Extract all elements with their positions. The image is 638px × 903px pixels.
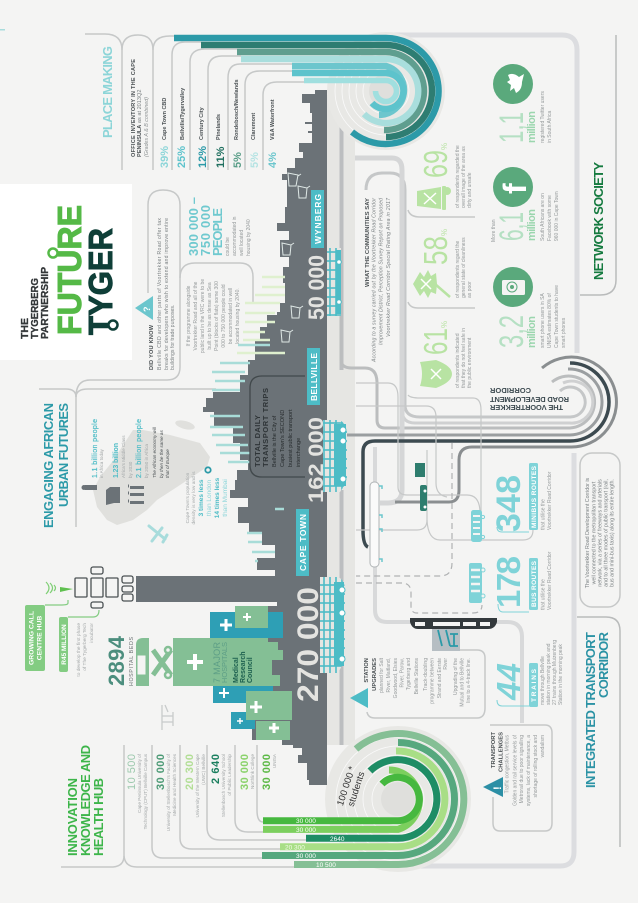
transport challenges: Traffic congestion, Metbus (504, 735, 510, 793)
logo panel: PARTNERSHIP (40, 267, 51, 339)
what the communities say: According to a survey carried out by the Voortrekker Road Corridor (372, 198, 378, 363)
stat: minibus routes (490, 463, 553, 532)
title: innovation knowledge and health hub: KNOWLEDGE AND (78, 745, 93, 856)
station upgrades: Bellville Stations (414, 658, 420, 694)
stat: 61 percent (417, 321, 473, 388)
stat: bus routes (490, 551, 553, 612)
big figures and station labels: 50 000 (304, 255, 329, 320)
station upgrades: Mutual and to Bellville (460, 658, 466, 707)
did you know: Bellville CBD and other parts of Voortrekker Road offer tax (157, 218, 163, 370)
hospital beds stat: 2894 (104, 635, 129, 686)
university list: Cape Peninsula University of (137, 753, 142, 813)
university list (126, 753, 277, 831)
office inventory list: 39% (159, 146, 171, 168)
people stat: accommodated in (232, 216, 238, 256)
stat: 69 percent: of respondents regarded the (455, 145, 461, 208)
africa statistics: 2.1 billion people (136, 419, 143, 478)
bar values: 30 000 (296, 818, 316, 825)
station upgrades: Tygerberg and (406, 658, 412, 690)
stat: 69 percent (417, 143, 473, 208)
road band behind skyline (327, 95, 355, 745)
programme text: If the programme alongside (186, 285, 192, 346)
did you know: ? (142, 306, 152, 312)
did you know: DID YOU KNOW (149, 324, 155, 370)
smartphone stat: smart phones (561, 317, 567, 348)
pale skyline stripes (210, 277, 285, 561)
small hospital blocks (210, 606, 292, 740)
office inventory list: Bellville/Tygervalley (180, 87, 186, 140)
stat: 61 percent: that they do not feel safe in (461, 328, 467, 388)
bar values: 10 500 (316, 862, 336, 869)
office inventory list (159, 79, 279, 168)
total daily transport trips (250, 376, 305, 477)
what the communities say: WHAT THE COMMUNITIES SAY (365, 198, 371, 287)
big figures and station labels: 162 000 (305, 417, 328, 503)
facebook stat: 6,1 (493, 212, 531, 241)
smartphone stat: million (526, 316, 538, 348)
cape town density: than Mumbai (222, 479, 229, 517)
title: voortrekker road development corridor: CORRIDOR (489, 386, 531, 395)
office inventory intro (131, 59, 150, 157)
total daily transport trips: TRANSPORT TRIPS (261, 388, 270, 467)
africa people icons (82, 485, 144, 505)
title: voortrekker road development corridor: THE VOORTREKKER (489, 403, 563, 412)
stat: 58 percent: of respondents regard the (455, 241, 461, 298)
stat: 61 percent: % (440, 321, 449, 328)
stat: 61 percent: 61 (417, 328, 454, 355)
transit lines (341, 158, 616, 723)
title: innovation knowledge and health hub (65, 745, 106, 856)
title: network society: NETWORK SOCIETY (591, 162, 606, 280)
growing call centre hub tag: GROWING CALL (28, 611, 36, 665)
title: integrated transport corridor: INTEGRATED TRANSPORT (583, 632, 598, 788)
facebook stat: More than (491, 219, 497, 242)
stat: trains (490, 640, 564, 707)
transport challenges: CHALLENGES (498, 732, 504, 772)
mobile devices around tower (75, 567, 133, 608)
programme text: public land in the VRC were to be (200, 279, 206, 353)
university ring chart (262, 726, 471, 872)
stat: bus routes: that utilise the (540, 579, 546, 610)
hospital beds stat: HOSPITAL BEDS (129, 637, 135, 686)
university list: Medicine and Health Sciences (172, 753, 177, 816)
office inventory list: 12% (197, 146, 209, 168)
icon: hospital bed (136, 638, 171, 686)
r45 million tag: R45 MILLION (61, 624, 68, 665)
stat: trains: 44 (490, 663, 527, 701)
africa statistics: that of Europe (165, 449, 170, 478)
network society frame (385, 35, 616, 353)
stat: 58 percent: general state of cleanliness (461, 237, 467, 298)
office inventory list: 4% (267, 152, 279, 168)
university list: 20 300 (184, 754, 196, 790)
connector lines: engaging african (39, 190, 253, 527)
stat: 58 percent: as poor (467, 281, 473, 298)
corridor description box: network, via a series of freeways and arterials (598, 479, 604, 587)
place making ring chart (174, 32, 445, 150)
stat: bus routes: Voortrekker Road Corridor (547, 551, 553, 610)
twitter stat (493, 91, 553, 143)
facebook stat: Facebook with some (547, 195, 553, 241)
facebook stat: 960 000 in Cape Town (554, 191, 560, 241)
stat: trains: TRAINS (531, 668, 538, 702)
station upgrades: Upgrading of the (453, 658, 459, 695)
africa statistics: by 2050 in Africa (144, 444, 149, 478)
university list: 2 640 (210, 754, 222, 784)
teal bus: wynberg (327, 248, 341, 316)
stat: 69 percent: dirty and unsafe (467, 172, 473, 208)
minibus icon (471, 510, 485, 542)
hospital text: Council (247, 657, 254, 683)
cape town density: Cape Town's population (185, 472, 191, 523)
bar values: 2640 (330, 836, 345, 843)
station upgrades: line to a 4-track line. (466, 658, 472, 703)
total daily transport trips: busiest public transport (288, 409, 294, 467)
stat: 69 percent: overall image of the area as (461, 146, 467, 208)
title: engaging african urban futures: ENGAGING AFRICAN (41, 403, 56, 528)
africa statistics: by 2030 (128, 461, 133, 478)
big figures and station labels (292, 255, 329, 702)
university list: (UWC) Bellville (201, 754, 206, 785)
station platform and train (410, 618, 497, 651)
twitter stat: 1,1 (493, 112, 531, 143)
university list: of Public Leadership (227, 754, 232, 796)
station upgrades: Track-doubling (423, 658, 429, 691)
people stat: 750 000 (198, 205, 213, 256)
office inventory list: 5% (232, 152, 244, 168)
skyline (136, 90, 327, 785)
office inventory list: Century City (199, 106, 205, 140)
total daily transport trips: interchange (296, 438, 302, 467)
station tag: wynberg: WYNBERG (313, 194, 323, 244)
transport challenges: systems, lack of maintenance, a (526, 735, 532, 806)
teal bus: bellville (323, 420, 347, 492)
did you know (135, 218, 176, 370)
icon: broom (413, 270, 450, 298)
people stat: well located (239, 230, 245, 256)
station upgrades (350, 650, 485, 718)
bar values: 30 000 (296, 853, 316, 860)
station upgrades: Goodwood, Elsies (393, 658, 399, 698)
survey dividers (408, 210, 475, 308)
students label: students (346, 770, 367, 808)
university list: Technology (CPUT) Bellville Campus (143, 753, 148, 829)
station upgrades: Strand and Eerste (437, 658, 443, 698)
station upgrades: planned for Salt (379, 657, 385, 693)
office inventory list: Rondebosch/Newlands (234, 79, 240, 140)
transport challenges: TRANSPORT (491, 732, 497, 768)
twitter stat: million (526, 111, 538, 143)
growing call centre hub tag (25, 600, 99, 671)
facebook stat: million (526, 209, 538, 241)
antenna icon (46, 582, 73, 594)
programme text: Voortrekker Road and all of the (193, 281, 199, 350)
smartphone stat (493, 285, 567, 348)
total daily transport trips: Cape Town's SECOND (280, 410, 286, 467)
twitter stat: in South Africa (547, 111, 553, 143)
office inventory list: Claremont (251, 113, 257, 140)
corridor description box: bus and mini-bus taxis) along its entire length. (610, 479, 616, 587)
university list: 30 000 (239, 754, 251, 790)
stat: minibus routes: MINIBUS ROUTES (531, 465, 538, 528)
cape town density: 3 times less (198, 479, 205, 516)
university list: Stellenbosch University School (221, 754, 226, 817)
trolley icons (281, 173, 310, 342)
university list: 10 500 (126, 754, 138, 790)
title: integrated transport corridor (583, 631, 611, 788)
facebook stat (491, 191, 560, 242)
title: integrated transport corridor: CORRIDOR (596, 631, 611, 698)
station upgrades: River (443, 658, 449, 670)
office inventory intro: PENINSULA as at 2013Q2 (137, 90, 143, 157)
programme text: be accommodated in well (228, 288, 234, 344)
integrated transport frame (398, 453, 620, 866)
title: voortrekker road development corridor (489, 386, 569, 412)
facebook circle: f (497, 183, 533, 194)
programme text: 000 to 750 000 people could (221, 284, 227, 348)
did you know: breaks for developers who wish to extend and improve entire (164, 218, 170, 370)
title: engaging african urban futures: URBAN FUTURES (56, 403, 71, 507)
university list: 30 000 (155, 754, 167, 790)
office inventory list: 5% (249, 152, 261, 168)
did you know: buildings for trade purposes. (170, 305, 176, 370)
twitter stat: registered Twitter users (540, 91, 546, 143)
office inventory list: V&A Waterfront (270, 99, 276, 140)
r45 million tag: incubator (89, 623, 95, 643)
r45 million tag: of The Tygerberg Tech (82, 623, 88, 671)
africa statistics: 1.1 billion people (92, 419, 99, 478)
title: innovation knowledge and health hub: HEALTH HUB (91, 778, 106, 856)
office inventory list: Cape Town CBD (162, 98, 168, 140)
transport challenges: shortage of rolling stock and (533, 735, 539, 798)
stat: minibus routes: Voortrekker Road Corridor (547, 471, 553, 530)
logo panel: TYGERBERG (30, 278, 41, 339)
logo panel: TYGER (82, 228, 119, 335)
hospital text: Medical (233, 657, 240, 683)
logo panel (0, 184, 132, 360)
station upgrades: River, Maitland, (386, 658, 392, 692)
station tag: cape town (296, 509, 309, 576)
office inventory intro: (Grades A & B combined) (144, 97, 150, 157)
smartphone stat: UNISA estimates 80% of (547, 293, 553, 348)
stat: bus routes: BUS ROUTES (531, 560, 538, 607)
students label: 100 000 * (335, 765, 358, 807)
big figures and station labels: 270 000 (292, 587, 325, 702)
office inventory list: Pinelands (216, 114, 222, 140)
office inventory intro: OFFICE INVENTORY IN THE CAPE (131, 59, 137, 157)
main hospital block (173, 638, 283, 686)
title: place making: PLACE MAKING (100, 46, 115, 138)
icon: bin (417, 186, 451, 210)
people stat: could be (225, 237, 231, 256)
africa statistics: 1.23 billion (113, 443, 120, 478)
transport challenges: Metrorail due to poor signalling (519, 735, 525, 803)
transport challenges: ! (492, 786, 504, 790)
smartphone stat: 3,2 (493, 315, 531, 348)
transport challenges: Golden and rail service levels of (512, 734, 518, 806)
title: innovation knowledge and health hub: INNOVATION (65, 778, 80, 856)
r45 million tag (59, 617, 95, 677)
station upgrades: programme between (430, 658, 436, 704)
africa statistics: Africa's Middle Class (121, 435, 126, 478)
students label (335, 765, 367, 808)
university list: University of Stellenbosch's Faculty of (166, 753, 171, 831)
white train (370, 482, 382, 567)
title: engaging african urban futures (41, 403, 71, 528)
smartphone stat: Cape Town students to have (554, 285, 560, 348)
logo panel: THE (20, 318, 31, 339)
station tag: wynberg (311, 190, 324, 248)
station tag: cape town: CAPE TOWN (298, 514, 308, 571)
teal bus: cape town (320, 577, 345, 673)
people stat: PEOPLE (210, 208, 225, 256)
hospital text: 7 MAJOR (212, 642, 222, 683)
stat: 58 percent: 58 (417, 236, 454, 265)
university list: 30 000 (261, 754, 273, 790)
station tag: bellville: BELLVILLE (309, 353, 319, 401)
stat: trains: move through Bellville (540, 656, 546, 705)
people stat: housing by 2040 (246, 219, 252, 256)
green tram (415, 463, 427, 511)
programme text: Point (blocks of flats) some 300 (214, 281, 220, 351)
office inventory list: 11% (215, 146, 227, 168)
transport challenges (483, 725, 552, 831)
stat: 58 percent (417, 229, 473, 298)
icon: plane (149, 526, 167, 542)
bar values: 30 000 (296, 827, 316, 834)
station upgrades: UPGRADES (372, 658, 378, 691)
people stat (186, 197, 252, 256)
corridor description box (580, 453, 620, 607)
twitter circle (493, 64, 533, 104)
what the communities say: Improvement District, Perception Survey Report on Proposed (378, 197, 384, 345)
station upgrades: STATION (364, 658, 370, 683)
stat: minibus routes: that utilise the (540, 499, 546, 530)
stat: bus routes: 178 (490, 556, 527, 608)
bar values: 20 300 (285, 844, 305, 852)
university list: University of the Western Cape (195, 754, 200, 818)
logo panel: FUTURE (51, 205, 88, 335)
smartphone circle (493, 267, 533, 307)
cape town density: than London (206, 480, 213, 516)
station upgrades: River, Parow, (400, 658, 406, 687)
icon: plane outline (162, 705, 173, 730)
africa statistics: by then be the same as (159, 430, 164, 478)
people stat: 300 000 – (186, 197, 201, 256)
growing call centre hub tag: CENTRE HUB (36, 616, 44, 660)
stat: 69 percent: % (440, 143, 449, 150)
corridor description box: The Voortrekker Road Development Corridor is (585, 477, 591, 588)
connector lines: innovation (61, 745, 306, 867)
programme text: built up to be as dense as Sea (207, 282, 213, 350)
africa statistics: The African economy will (152, 426, 157, 478)
cape town density: 14 times less (214, 477, 221, 518)
africa statistics: in Africa today (99, 448, 104, 478)
icon: shield (420, 360, 452, 388)
hospital text: HOSPITALS (220, 642, 229, 683)
stat: minibus routes: 348 (490, 475, 528, 532)
hospital crosses (187, 613, 279, 733)
corridor description box: well connected to the metropolitan transport (592, 481, 598, 584)
total daily transport trips: Bellville is the City of (272, 415, 278, 467)
stat: trains: station in morning peak and (546, 643, 552, 705)
hospital text: Research (240, 651, 247, 683)
stat: 61 percent: the public environment (467, 337, 473, 388)
corridor description box: and to all three modes of public transport (rail, (604, 479, 610, 587)
bar values (285, 818, 345, 869)
facebook stat: South Africans are on (540, 193, 546, 241)
africa map (93, 419, 210, 525)
station tag: bellville (307, 348, 320, 405)
cape town density (185, 467, 229, 525)
smartphone stat: smart phone users in SA (540, 293, 546, 348)
stat: 61 percent: of respondents indicated (455, 333, 461, 388)
r45 million tag: to develop the first phase (76, 623, 82, 677)
office inventory list: 25% (176, 146, 188, 168)
hospital text (212, 642, 254, 683)
connector lines: place making (85, 34, 304, 170)
stat: trains: Station in the morning peak (558, 644, 564, 705)
total daily transport trips: TOTAL DAILY (253, 415, 262, 467)
cape town density: density is very low and is (191, 471, 197, 525)
stat: trains: 27 trains through Muizenberg (552, 640, 558, 705)
stat: 58 percent: % (440, 229, 449, 236)
university list: UNISA (272, 753, 277, 768)
programme text: located housing by 2040. (235, 288, 241, 344)
programme text (186, 279, 241, 353)
what the communities say: Voortrekker Road Corridor Special Rating Area in 2017 (386, 197, 392, 337)
stat: 69 percent: 69 (417, 150, 454, 178)
africa statistics (92, 419, 170, 478)
facebook circle (493, 167, 533, 207)
university list: Northlink College (250, 754, 255, 789)
transport challenges: vandalism (540, 735, 546, 758)
title: voortrekker road development corridor: ROAD DEVELOPMENT (490, 395, 569, 404)
bus icon (469, 563, 485, 603)
what the communities say (365, 197, 392, 363)
